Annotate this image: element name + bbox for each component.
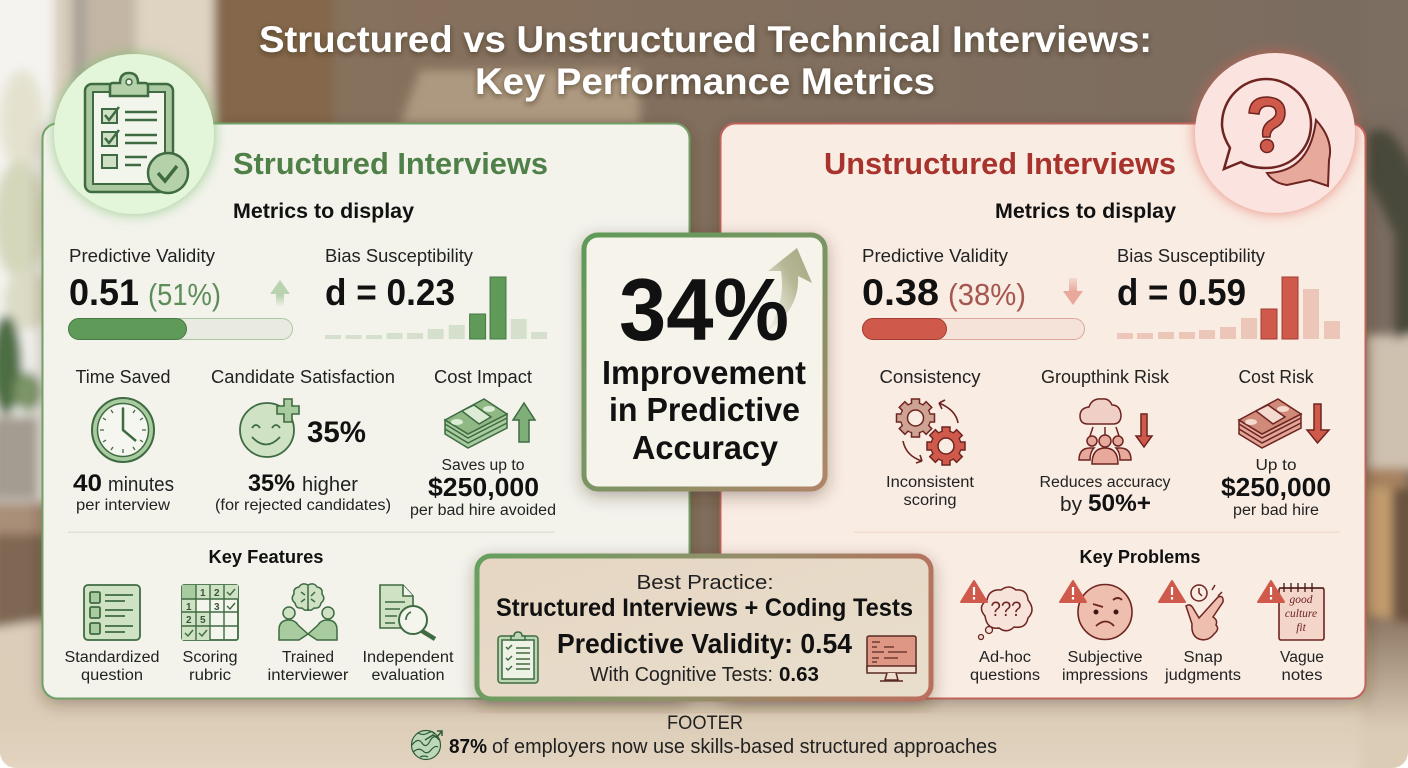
metric: time saved: minutes	[108, 474, 174, 496]
problem: subjective impressions	[1060, 581, 1148, 684]
metric: cost risk: Cost Risk	[1238, 367, 1314, 387]
feature: standardized question: Standardized	[64, 649, 160, 666]
metric: predictive validity: 0.38	[862, 272, 939, 313]
metric: predictive validity: Predictive Validity	[69, 246, 215, 266]
problem: vague notes	[1258, 581, 1324, 684]
metric: time saved: Time Saved	[76, 367, 170, 387]
callout: 34% improvement: Accuracy	[632, 429, 779, 466]
icon: gears	[896, 399, 965, 465]
icon: scoring grid: 2	[186, 615, 192, 626]
feature: standardized question	[64, 585, 160, 684]
problem: subjective impressions: impressions	[1062, 667, 1148, 684]
heading: unstructured interviews: Unstructured Interviews	[824, 146, 1176, 181]
feature: scoring rubric: Scoring	[182, 649, 238, 666]
feature: scoring rubric: rubric	[189, 667, 231, 684]
icon: scoring grid: 2	[214, 588, 220, 599]
title: Structured vs Unstructured Technical Interviews:	[259, 19, 1152, 60]
icon: warning	[1060, 581, 1086, 602]
metric: bias susceptibility	[1117, 246, 1340, 339]
problem: ad-hoc questions: questions	[970, 667, 1040, 684]
arrow: up	[270, 280, 290, 306]
callout: 34% improvement: 34%	[619, 260, 789, 359]
heading: key features: Key Features	[208, 546, 324, 567]
icon: scoring grid: 5	[200, 615, 206, 626]
icon: question speech bubbles	[1195, 53, 1355, 213]
metric: time saved: 40	[73, 470, 102, 497]
metric: cost risk: $250,000	[1221, 472, 1331, 502]
metric: cost impact: Saves up to	[442, 457, 524, 474]
metric: cost risk: per bad hire	[1233, 502, 1319, 519]
problem: vague notes: notes	[1282, 667, 1323, 684]
problem: snap judgments	[1159, 581, 1241, 684]
progress bar	[862, 318, 1084, 340]
metric: groupthink risk: by	[1060, 494, 1082, 516]
metric: cost impact: $250,000	[428, 472, 539, 502]
feature: standardized question: question	[81, 667, 143, 684]
icon: notepad: good	[1290, 594, 1313, 606]
arrow: down	[1063, 278, 1083, 305]
histogram	[1117, 277, 1340, 339]
footer: 87%	[449, 736, 487, 758]
metric: cost impact: Cost Impact	[434, 367, 532, 387]
panel: unstructured interviews	[720, 53, 1366, 698]
icon: smiley plus	[240, 399, 299, 457]
icon: scoring grid	[182, 585, 238, 640]
metric: consistency: scoring	[904, 492, 956, 509]
callout: best practice: 0.63	[779, 664, 819, 686]
metric: predictive validity	[862, 246, 1084, 340]
metric: consistency: Consistency	[880, 367, 980, 387]
icon: warning	[961, 581, 987, 602]
icon: money stack and down arrow	[1239, 399, 1329, 448]
callout: best practice: Structured Interviews + Coding Tests	[496, 594, 913, 622]
metric: bias susceptibility	[325, 246, 547, 339]
problem: snap judgments: Snap	[1184, 649, 1222, 666]
metric: predictive validity: Predictive Validity	[862, 246, 1008, 266]
metric: bias susceptibility: d = 0.59	[1117, 272, 1246, 313]
icon: small clipboard	[498, 632, 538, 683]
icon: clipboard badge	[54, 54, 214, 214]
metric: bias susceptibility: d = 0.23	[325, 272, 455, 313]
metric: candidate satisfaction: (for rejected candidates)	[215, 497, 391, 514]
feature: scoring rubric	[182, 585, 238, 684]
problem: vague notes: Vague	[1280, 649, 1324, 666]
metric: time saved	[73, 367, 174, 514]
metric: predictive validity: 0.51	[69, 272, 139, 313]
problem: snap judgments: judgments	[1164, 667, 1241, 684]
metric: consistency	[880, 367, 980, 509]
callout: best practice	[477, 556, 931, 699]
divider	[854, 532, 1340, 533]
callout: 34% improvement	[584, 235, 825, 489]
metric: cost impact	[410, 367, 556, 519]
title	[259, 19, 1152, 102]
icon: frowning face	[1060, 581, 1132, 640]
metric: cost risk	[1221, 367, 1331, 519]
problem: ad-hoc questions	[961, 581, 1040, 684]
callout: best practice: With Cognitive Tests:	[590, 664, 773, 686]
metric: cost impact: per bad hire avoided	[410, 502, 556, 519]
metric: candidate satisfaction: 35%	[307, 416, 366, 449]
footer	[412, 713, 997, 760]
problem: ad-hoc questions: Ad-hoc	[979, 649, 1031, 666]
metric: groupthink risk	[1040, 367, 1171, 517]
title: Key Performance Metrics	[475, 61, 935, 102]
metric: bias susceptibility: Bias Susceptibility	[325, 246, 473, 266]
icon: notepad: fit	[1296, 622, 1307, 634]
icon: scoring grid: 3	[214, 602, 220, 613]
icon: notepad: culture	[1285, 608, 1317, 620]
metric: candidate satisfaction: Candidate Satisfaction	[211, 367, 395, 387]
divider	[68, 532, 555, 533]
panel: structured interviews	[42, 54, 690, 698]
icon: checklist	[84, 585, 140, 640]
icon: scoring grid: 1	[186, 602, 192, 613]
metric: groupthink risk: Reduces accuracy	[1040, 474, 1171, 491]
histogram	[325, 277, 547, 339]
metric: consistency: Inconsistent	[886, 474, 975, 491]
metric: groupthink risk: Groupthink Risk	[1041, 367, 1170, 387]
metric: candidate satisfaction	[211, 367, 395, 514]
metric: bias susceptibility: Bias Susceptibility	[1117, 246, 1265, 266]
callout: best practice: Best Practice:	[636, 571, 774, 594]
subheading: metrics: Metrics to display	[995, 200, 1176, 223]
feature: trained interviewer: interviewer	[268, 667, 348, 684]
metric: candidate satisfaction: 35%	[248, 470, 295, 497]
metric: predictive validity: (51%)	[148, 277, 221, 312]
icon: warning	[1258, 581, 1284, 602]
feature: trained interviewer: Trained	[282, 649, 334, 666]
icon: monitor with code	[867, 636, 916, 681]
callout: 34% improvement: in Predictive	[609, 391, 800, 428]
progress bar	[68, 318, 292, 340]
icon: money stack and arrow	[445, 399, 535, 448]
feature: independent evaluation: Independent	[362, 649, 454, 666]
icon: snapping hand and clock	[1159, 581, 1223, 640]
heading: structured interviews: Structured Interviews	[233, 146, 548, 181]
metric: groupthink risk: 50%+	[1088, 490, 1151, 517]
feature: independent evaluation: evaluation	[372, 667, 444, 684]
heading: key problems: Key Problems	[1080, 546, 1200, 567]
arrow: upward trend	[766, 248, 812, 332]
feature: trained interviewer	[268, 584, 348, 684]
icon: brain and handshake	[279, 584, 337, 640]
metric: time saved: per interview	[76, 497, 170, 514]
callout: 34% improvement: Improvement	[602, 354, 806, 391]
footer: of employers now use skills-based structured approaches	[492, 736, 997, 758]
icon: cloud over people with arrow	[1079, 399, 1152, 464]
icon: clock	[92, 398, 154, 462]
icon: scoring grid: 1	[200, 588, 206, 599]
metric: cost risk: Up to	[1256, 457, 1296, 474]
icon: notepad	[1258, 581, 1324, 640]
callout: best practice: Predictive Validity: 0.54	[557, 628, 852, 659]
icon: document magnifier	[380, 585, 435, 639]
icon: thought cloud: ???	[990, 598, 1022, 621]
problem: subjective impressions: Subjective	[1068, 649, 1142, 666]
icon: globe with trend	[412, 730, 442, 760]
metric: candidate satisfaction: higher	[302, 474, 358, 496]
icon: warning	[1159, 581, 1185, 602]
metric: predictive validity	[68, 246, 292, 340]
metric: predictive validity: (38%)	[948, 277, 1026, 312]
footer: FOOTER	[667, 713, 743, 734]
subheading: metrics: Metrics to display	[233, 200, 414, 223]
feature: independent evaluation	[362, 585, 454, 684]
